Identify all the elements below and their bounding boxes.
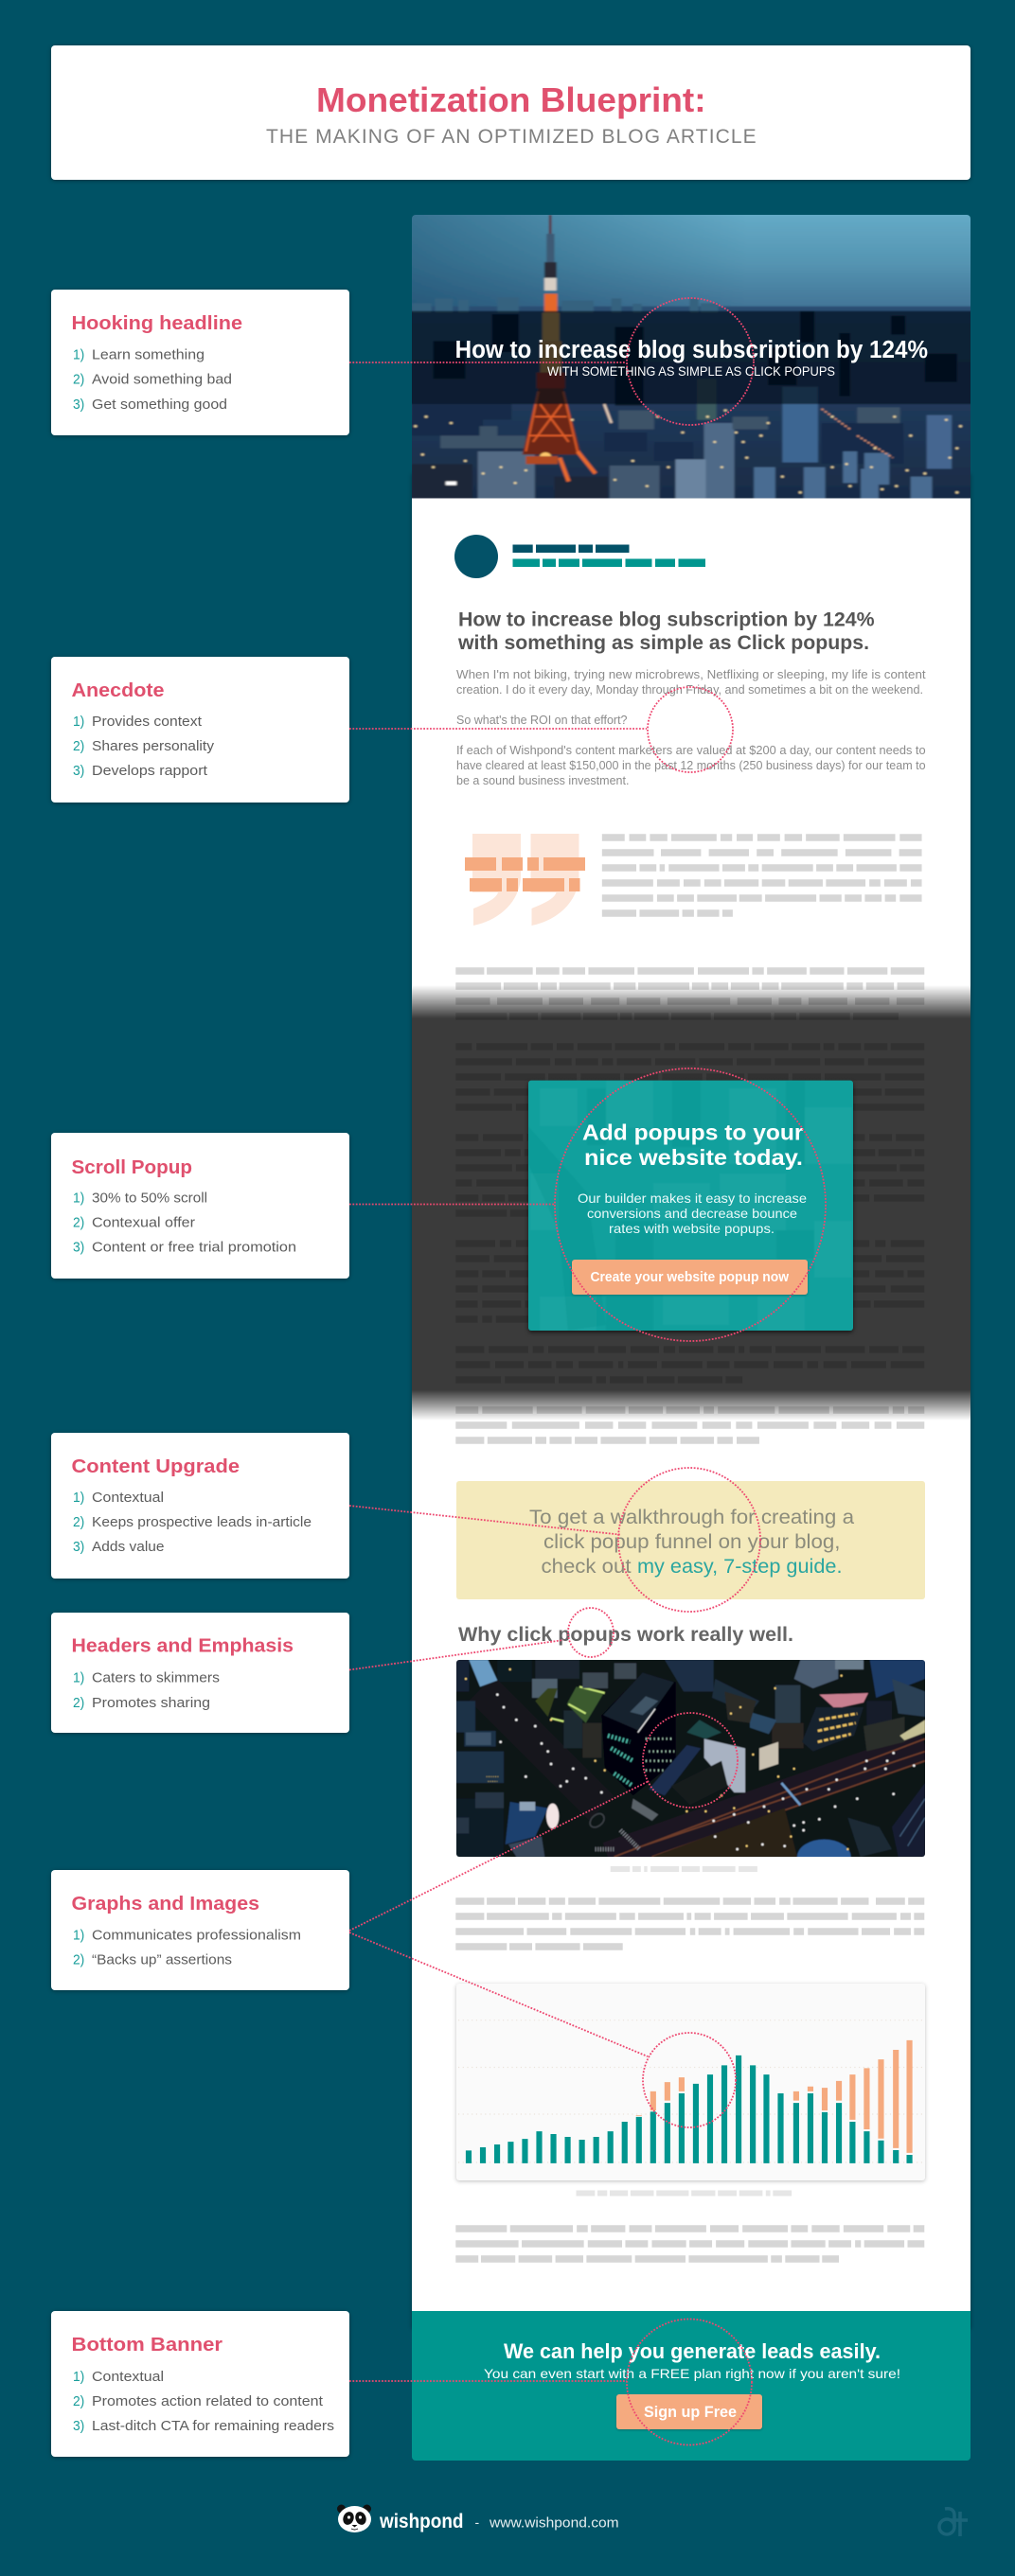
card: hooking headline: 3)	[73, 397, 84, 413]
card: bottom banner: Contextual	[92, 2370, 164, 2385]
content upgrade box: click popup funnel on your blog,	[543, 1530, 841, 1553]
card: anecdote: 1)	[73, 715, 84, 730]
card: anecdote: 3)	[73, 764, 84, 779]
popup body text	[578, 1191, 807, 1236]
banner subheading: You can even start with a FREE plan right now if you aren't sure!	[484, 2366, 900, 2381]
popup heading	[582, 1120, 803, 1170]
card: content upgrade: Contextual	[92, 1491, 164, 1506]
card: headers and emphasis: 2)	[73, 1696, 84, 1711]
title card	[51, 45, 970, 180]
popup button: Create your website popup now	[591, 1270, 790, 1285]
card: headers and emphasis: Caters to skimmers	[92, 1671, 220, 1686]
wishpond wordmark: wishpond	[379, 2511, 464, 2532]
card: content upgrade: 1)	[73, 1491, 84, 1506]
subheading: Why click popups work really well.	[458, 1623, 793, 1646]
popup button	[572, 1260, 808, 1295]
hero subheadline: WITH SOMETHING AS SIMPLE AS CLICK POPUPS	[547, 363, 835, 379]
popup body text: Our builder makes it easy to increase	[578, 1191, 807, 1206]
card: hooking headline: Get something good	[92, 397, 227, 413]
card: scroll popup: Content or free trial promotion	[92, 1241, 296, 1256]
card: content upgrade: 3)	[73, 1540, 84, 1555]
content upgrade box: my easy, 7-step guide.	[637, 1555, 843, 1578]
banner button	[616, 2394, 762, 2429]
content upgrade box: check out	[542, 1555, 632, 1578]
card: anecdote: 2)	[73, 739, 84, 754]
callout: bottom banner marker	[349, 2319, 752, 2445]
card: graphs and images: Communicates professionalism	[92, 1929, 301, 1944]
card: scroll popup: Contexual offer	[92, 1215, 195, 1230]
subtitle: THE MAKING OF AN OPTIMIZED BLOG ARTICLE	[266, 126, 757, 148]
article title: How to increase blog subscription by 124%	[458, 608, 875, 630]
city aerial image	[456, 1660, 925, 1857]
card: bottom banner: Bottom Banner	[72, 2335, 223, 2355]
card: anecdote	[51, 657, 349, 803]
card: hooking headline: Learn something	[92, 348, 205, 363]
card: bottom banner: Promotes action related to content	[92, 2394, 323, 2409]
card: graphs and images: 1)	[73, 1929, 84, 1944]
article title	[457, 608, 875, 654]
popup heading: nice website today.	[584, 1145, 803, 1170]
card: hooking headline: Avoid something bad	[92, 373, 232, 388]
card: bottom banner: Last-ditch CTA for remaining readers	[92, 2419, 334, 2434]
card: hooking headline: 2)	[73, 373, 84, 388]
card: content upgrade: Content Upgrade	[72, 1456, 240, 1477]
banner heading: We can help you generate leads easily.	[504, 2339, 881, 2363]
banner button: Sign up Free	[644, 2403, 737, 2421]
card: content upgrade: Adds value	[92, 1540, 165, 1555]
callout: image marker	[349, 1713, 738, 1931]
card: scroll popup: 1)	[73, 1191, 84, 1206]
card: scroll popup: Scroll Popup	[72, 1157, 192, 1178]
hero image with headline	[404, 208, 978, 505]
article anecdote text: be a sound business investment.	[456, 774, 629, 787]
scroll popup panel	[528, 1081, 853, 1334]
card: bottom banner: 1)	[73, 2370, 84, 2385]
icon: corner logo	[939, 2509, 968, 2536]
callout: anecdote marker	[349, 687, 733, 772]
card: headers and emphasis: Headers and Emphasis	[72, 1636, 294, 1657]
title: Monetization Blueprint:	[316, 80, 706, 119]
card: anecdote: Anecdote	[72, 680, 165, 701]
card: headers and emphasis	[51, 1613, 349, 1733]
article anecdote text: If each of Wishpond's content marketers are valued at $200 a day, our content needs to	[456, 744, 926, 757]
hero headline: How to increase blog subscription by 124%	[455, 337, 928, 363]
card: hooking headline	[51, 290, 349, 435]
popup body text: conversions and decrease bounce	[587, 1206, 797, 1221]
card: scroll popup	[51, 1133, 349, 1279]
article title: with something as simple as Click popups.	[457, 631, 869, 654]
article anecdote text: When I'm not biking, trying new microbrews, Netflixing or sleeping, my life is content	[456, 668, 926, 681]
card: scroll popup: 30% to 50% scroll	[92, 1191, 207, 1206]
placeholder text after chart	[455, 2229, 924, 2259]
card: anecdote: Develops rapport	[92, 764, 207, 779]
quote mark with placeholder bars	[465, 834, 585, 926]
article anecdote text: have cleared at least $150,000 in the past 12 months (250 business days) for our team to	[456, 759, 926, 772]
card: scroll popup: 2)	[73, 1215, 84, 1230]
bar chart	[456, 1984, 925, 2180]
callout: hooking headline marker	[349, 298, 754, 425]
card: scroll popup: 3)	[73, 1241, 84, 1256]
card: graphs and images: “Backs up” assertions	[92, 1953, 232, 1968]
placeholder text after image	[455, 1901, 924, 1947]
panel: article page background	[412, 473, 970, 2328]
card: hooking headline: 1)	[73, 348, 84, 363]
image caption placeholder	[611, 1866, 757, 1872]
popup body text: rates with website popups.	[609, 1221, 775, 1236]
icon: panda	[337, 2504, 371, 2532]
card: graphs and images	[51, 1870, 349, 1990]
popup dim overlay	[412, 985, 970, 1420]
card: content upgrade: 2)	[73, 1515, 84, 1530]
card: bottom banner: 3)	[73, 2419, 84, 2434]
card: bottom banner: 2)	[73, 2394, 84, 2409]
card: graphs and images: Graphs and Images	[72, 1894, 259, 1914]
orange bars	[639, 2040, 910, 2153]
card: hooking headline: Hooking headline	[72, 313, 242, 334]
callout: scroll popup marker	[349, 1068, 826, 1341]
callout: chart marker	[349, 1932, 736, 2127]
separator: -	[475, 2514, 479, 2530]
chart caption placeholder	[576, 2190, 792, 2196]
card: content upgrade: Keeps prospective leads in-article	[92, 1515, 312, 1530]
article anecdote text: So what's the ROI on that effort?	[456, 714, 628, 727]
teal bars	[469, 2056, 910, 2163]
card: headers and emphasis: Promotes sharing	[92, 1696, 210, 1711]
author avatar and byline bars	[454, 535, 705, 578]
content upgrade box: To get a walkthrough for creating a	[529, 1506, 854, 1528]
article anecdote text	[456, 668, 926, 787]
card: anecdote: Shares personality	[92, 739, 215, 754]
callout: headers marker	[349, 1608, 614, 1669]
website url: www.wishpond.com	[489, 2515, 619, 2531]
content upgrade box	[456, 1481, 925, 1599]
popup heading: Add popups to your	[582, 1120, 803, 1145]
article placeholder text behind popup	[455, 971, 924, 1440]
bottom banner	[412, 2311, 970, 2461]
article anecdote text: creation. I do it every day, Monday through Friday, and sometimes a bit on the weekend.	[456, 683, 923, 697]
card: bottom banner	[51, 2311, 349, 2457]
callout: content upgrade marker	[349, 1468, 760, 1612]
footer brand	[337, 2504, 619, 2532]
quote placeholder text	[602, 838, 922, 913]
card: headers and emphasis: 1)	[73, 1671, 84, 1686]
card: content upgrade	[51, 1433, 349, 1579]
card: anecdote: Provides context	[92, 715, 202, 730]
card: graphs and images: 2)	[73, 1953, 84, 1968]
